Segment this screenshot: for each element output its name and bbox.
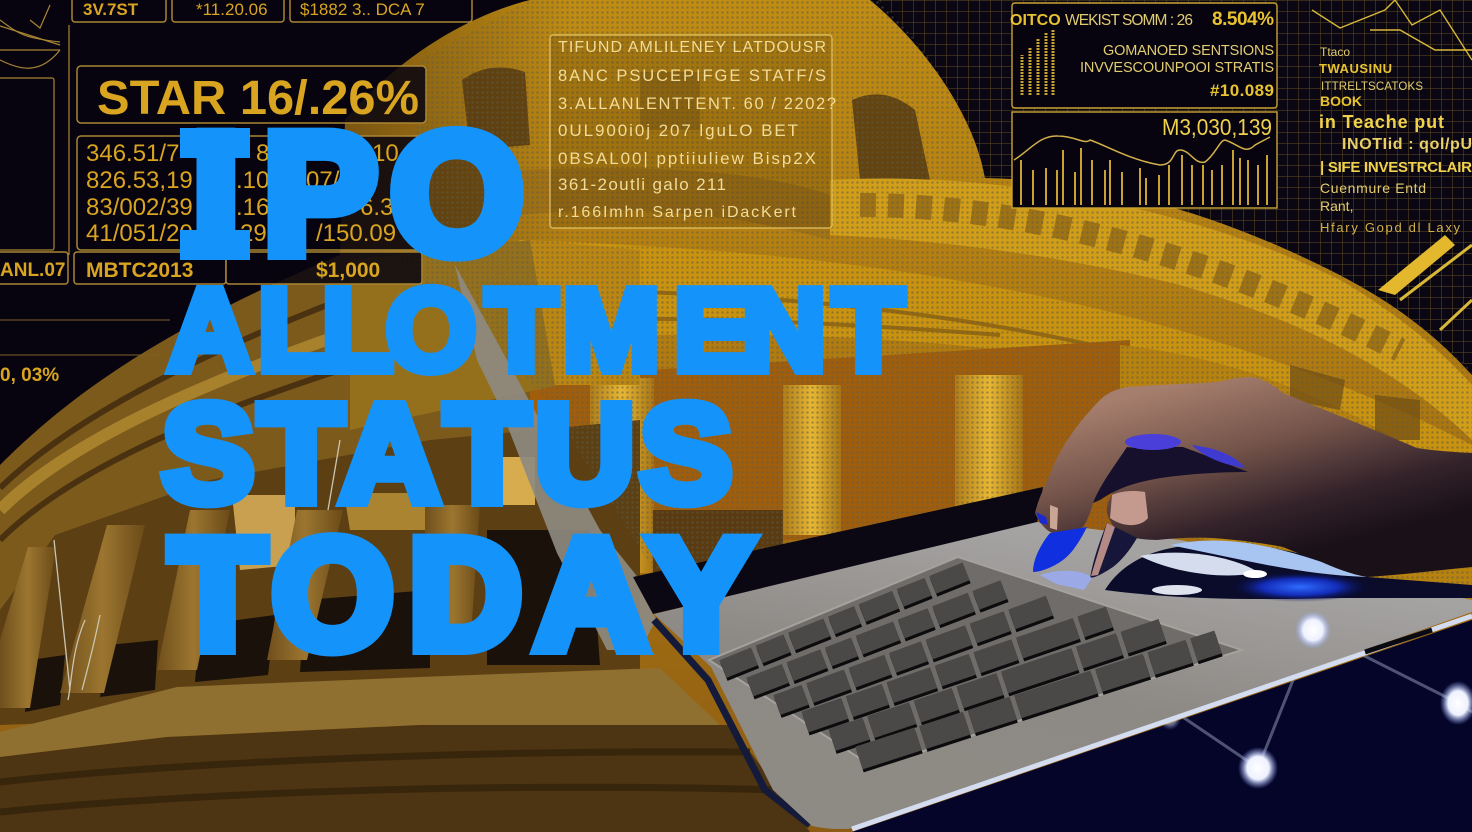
title word status: STATUS [162,377,732,531]
dome lower cornice [520,168,830,240]
panel: right side text column: Ttaco [1320,45,1350,59]
panel: right side text column: Cuenmure Entd [1320,180,1426,196]
laptop underside [852,620,1472,832]
keyboard well [709,557,1242,767]
lit bays [232,495,295,570]
title line IPO: IPO [192,98,524,290]
laptop [633,487,1472,829]
panel: market summary: INVVESCOUNPOOI STRATIS [1080,60,1274,76]
entablature bands [400,289,1472,480]
panel: figures table [77,136,422,250]
panel: centre status text [550,35,836,228]
dome left shading [340,0,570,262]
second fingertip [1090,523,1137,578]
panel: figures table: 6.3 [360,194,393,221]
right grid lines [878,0,1472,372]
panel: centre status text: 0UL900i0j 207 lguLO BET [558,121,798,140]
screen edge streak [455,265,656,650]
panel: centre status text: 361-2outli galo 211 [558,175,726,194]
panel: figures table: 10 [372,140,399,167]
panel: market summary: 8.504% [1212,9,1274,30]
dark gates [25,530,600,712]
balustrade [0,668,720,757]
blue light on palm [1192,445,1245,468]
panel: market summary: GOMANOED SENTSIONS [1103,43,1274,59]
entablature [420,240,1472,490]
mid right gold zone [530,240,640,385]
panel: centre status text: 8ANC PSUCEPIFGE STATF/S [558,67,826,85]
side slot [1365,630,1432,652]
second finger highlight [1091,523,1115,576]
halftone overlay [400,0,1472,600]
colonnade ceiling [0,420,640,725]
panel: figures table: 346.51/7 [86,140,179,167]
ticker remnant: 0, 03% [0,365,59,386]
palm and fingers [1035,377,1472,577]
panel: right side text column: Hfary Gopd dl Laxy [1320,220,1460,235]
right upper wall [1120,345,1472,600]
gold column one [590,378,654,573]
panel: figures table: .107 [236,167,283,194]
panel: centre status text: TIFUND AMLILENEY LATDOUSR [558,39,826,56]
dark patches right [1290,365,1420,440]
panel: lower ticker row: ANL.07 [0,260,65,281]
left dome entablature [0,250,530,640]
panel: centre status text: 3.ALLANLENTTENT. 60 / 2202? [558,95,836,113]
reflection highlight [1243,570,1267,578]
re-mask top left dark panel zone [0,0,420,465]
panel: figures table: 83/002/39 [86,194,193,221]
ticker remnant [0,320,170,386]
panel: left ticker boxes: 3V.7ST [83,0,139,19]
hinge side edge [654,620,810,825]
panel: lower ticker row: MBTC2013 [86,259,193,282]
panel: left ticker boxes: $1882 3.. DCA 7 [300,0,425,19]
front lip [852,616,1472,829]
node on deck [1295,611,1331,649]
title: IPO allotment status today [162,98,904,682]
reflection base [1105,544,1472,599]
cornice arcs [0,300,340,540]
panel: right side text column: ITTRELTSCATOKS [1321,81,1423,93]
chart: market line and bars: M3,030,139 [1162,114,1272,140]
plinth bands [0,725,810,832]
panel: right side text column: BOOK [1320,93,1362,109]
panel: lower ticker row: $1,000 [316,259,380,282]
finger gap shadow [1093,447,1248,503]
panel: left sparkline [0,5,69,255]
panel: market summary: OITCO [1010,12,1061,29]
blue light on finger [1125,434,1181,450]
deck [654,522,1472,829]
keyboard key shadows [724,568,1219,761]
panel: left ticker boxes [72,0,472,22]
title word allotment: ALLOTMENT [168,265,904,395]
touch glow [1040,571,1092,590]
gold column three [955,375,1023,510]
panel: right side text column [1312,0,1472,330]
panel: lower ticker row [0,252,422,284]
panel: right side text column: in Teache put [1319,112,1444,132]
thumb nail [1110,491,1148,525]
panel: left ticker boxes: *11.20.06 [196,0,268,19]
keyboard keys [723,565,1218,758]
panel: market summary: #10.089 [1210,81,1274,100]
balcony balusters [860,205,1400,350]
panel: figures table: 826.53,19 [86,167,193,194]
panel: right side text column: TWAUSINU [1319,61,1392,76]
panel: centre status text: 0BSAL00| pptiiuliew Bisp2X [558,149,816,168]
title word today: TODAY [170,508,753,682]
panel: figures table: .16 [236,194,269,221]
panel: figures table: /150.09 [316,220,396,247]
panel: centre status text: r.166Imhn Sarpen iDacKert [558,204,797,221]
dark gate [653,510,783,580]
network nodes [1159,630,1472,789]
dome windows [420,68,930,235]
blue glow [1230,572,1370,602]
chart: market line and bars [1012,112,1277,208]
index nail [1050,505,1058,530]
panel: right side text column: | SIFE INVESTRCLAIR [1320,159,1472,176]
hand reflection on trackpad [1105,540,1472,602]
panel: figures table: 8 [256,140,269,167]
bezel [633,487,1043,614]
white reflection [1140,553,1258,575]
columns left [0,505,480,708]
panel: figures table: 07/. [306,167,346,194]
blue index fingertip [1033,527,1087,572]
panel: figures table: 41/051/20 [86,220,193,247]
panel: market summary: WEKIST SOMM : 26 [1065,12,1193,29]
panel: right side text column: INOTIid : qol/pU [1342,136,1472,153]
panel: right side text column: Rant, [1320,198,1353,214]
white reflection small [1152,585,1202,595]
panel: star percentage: STAR 16/.26% [97,72,419,125]
wires [54,440,340,700]
gold column two [783,385,841,535]
balcony band [830,178,1472,440]
hand [1033,377,1472,590]
cornice highlight [0,335,340,510]
re-mask top right dark panel zone [878,0,1472,372]
index nail edge [1036,512,1048,525]
panel: market summary [1010,3,1277,108]
panel: figures table: 29 [240,220,267,247]
upper mid gold zone [350,240,560,430]
centre wall [520,340,1130,540]
light blue sheen [1170,540,1367,577]
